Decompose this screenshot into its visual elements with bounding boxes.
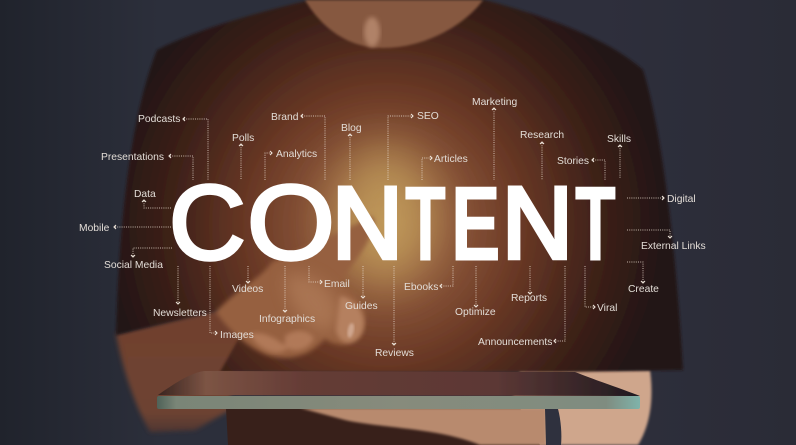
labels: Social Media	[104, 260, 163, 271]
word CONTENT: N	[332, 166, 403, 280]
tablet screen	[158, 371, 640, 396]
labels: Brand	[271, 112, 299, 123]
labels: Podcasts	[138, 114, 180, 125]
labels: Infographics	[259, 314, 315, 325]
labels: Skills	[607, 134, 631, 145]
lower hand	[300, 408, 546, 445]
labels: Reports	[511, 293, 547, 304]
left forearm	[116, 300, 300, 432]
labels: Research	[520, 130, 564, 141]
labels: Articles	[434, 154, 468, 165]
labels: Analytics	[276, 149, 317, 160]
shirt below tablet	[226, 408, 540, 445]
labels: SEO	[417, 111, 439, 122]
labels: Reviews	[375, 348, 414, 359]
labels: Marketing	[472, 97, 517, 108]
labels: Announcements	[478, 337, 552, 348]
word CONTENT	[169, 164, 616, 283]
labels: Presentations	[101, 152, 164, 163]
labels: Email	[324, 279, 350, 290]
labels	[79, 97, 706, 359]
labels: Data	[134, 189, 156, 200]
labels: Stories	[557, 156, 589, 167]
person: shirt with glow	[116, 0, 683, 372]
labels: Viral	[597, 303, 617, 314]
labels: Polls	[232, 133, 254, 144]
labels: Create	[628, 284, 659, 295]
labels: Images	[220, 330, 254, 341]
labels: Guides	[345, 301, 378, 312]
word CONTENT: O	[247, 164, 335, 282]
pointing hand	[216, 216, 374, 358]
watch strap	[545, 409, 561, 445]
labels: Blog	[341, 123, 362, 134]
labels: Mobile	[79, 223, 110, 234]
word CONTENT: T	[405, 164, 446, 283]
tablet edge	[157, 396, 640, 409]
word CONTENT: N	[502, 166, 573, 280]
labels: Digital	[667, 194, 696, 205]
labels: External Links	[641, 241, 706, 252]
neck	[305, 0, 483, 48]
labels: Optimize	[455, 307, 496, 318]
right forearm	[500, 370, 652, 445]
word CONTENT: E	[451, 165, 500, 283]
connector lines	[114, 108, 672, 345]
labels: Newsletters	[153, 308, 207, 319]
labels: Ebooks	[404, 282, 438, 293]
labels: Videos	[232, 284, 263, 295]
word CONTENT: C	[169, 164, 246, 282]
word CONTENT: T	[575, 164, 616, 283]
